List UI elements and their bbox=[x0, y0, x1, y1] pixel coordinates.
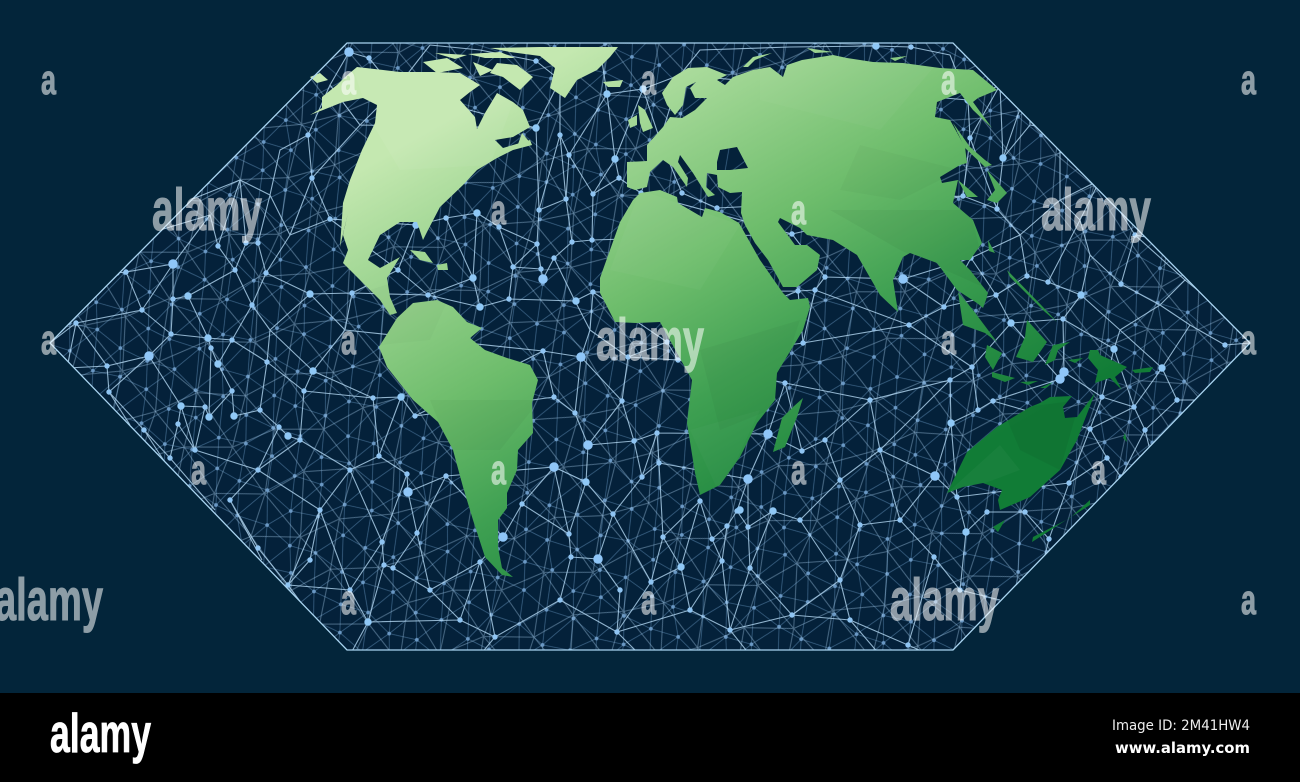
Arctic islands bbox=[310, 52, 533, 147]
small watermark letters: a bbox=[1241, 316, 1256, 363]
large watermark words: alamy bbox=[596, 307, 704, 373]
small watermark letters: a bbox=[341, 316, 356, 363]
map panel: Eckert projection hexagon bbox=[40, 40, 1260, 660]
Australia bbox=[947, 393, 1095, 510]
large watermark words: alamy bbox=[890, 567, 999, 633]
watermarks bbox=[0, 56, 1256, 633]
small watermark letters: a bbox=[941, 56, 956, 103]
small watermark letters: a bbox=[341, 56, 356, 103]
Malay peninsula and Indochina tip bbox=[957, 280, 997, 342]
faint network mesh bbox=[40, 40, 1260, 660]
New Guinea bbox=[1088, 350, 1153, 390]
large watermark words: alamy bbox=[0, 567, 103, 633]
map border bbox=[50, 43, 1250, 650]
small watermark letters: a bbox=[791, 186, 806, 233]
small watermark letters bbox=[41, 56, 1256, 623]
Africa bbox=[600, 190, 810, 495]
map hexagon fill bbox=[50, 43, 1250, 650]
South America bbox=[379, 300, 538, 577]
image id: Image ID: 2M41HW4 bbox=[1112, 718, 1250, 734]
small watermark letters: a bbox=[941, 316, 956, 363]
small watermark letters: a bbox=[491, 186, 506, 233]
large network nodes bbox=[149, 52, 1064, 559]
large watermark words bbox=[0, 177, 1151, 633]
low-poly land facets bbox=[340, 60, 1080, 495]
small watermark letters: a bbox=[1241, 576, 1256, 623]
small watermark letters: a bbox=[641, 56, 656, 103]
British Isles and Iceland bbox=[603, 80, 653, 132]
website: www.alamy.com bbox=[1115, 739, 1250, 757]
network nodes bbox=[67, 46, 1225, 645]
large watermark words: alamy bbox=[1041, 177, 1151, 243]
small watermark letters: a bbox=[41, 56, 56, 103]
Eurasia bbox=[627, 55, 997, 312]
footer bar bbox=[0, 693, 1300, 782]
medium network nodes bbox=[181, 46, 1162, 622]
Tasmania, New Zealand, New Caledonia bbox=[993, 433, 1127, 542]
small watermark letters: a bbox=[491, 446, 506, 493]
small watermark letters: a bbox=[341, 576, 356, 623]
small watermark letters: a bbox=[641, 576, 656, 623]
North America bbox=[310, 67, 532, 315]
continents bbox=[310, 47, 1153, 577]
small watermark letters: a bbox=[791, 446, 806, 493]
footer logo: alamy bbox=[50, 702, 151, 764]
small watermark letters: a bbox=[191, 446, 206, 493]
small watermark letters: a bbox=[1241, 56, 1256, 103]
Caribbean islands bbox=[410, 250, 448, 270]
small watermark letters: a bbox=[1091, 446, 1106, 493]
northern Eurasian islands bbox=[743, 48, 907, 67]
Indonesian islands bbox=[985, 320, 1083, 388]
large watermark words: alamy bbox=[152, 177, 262, 243]
Greenland bbox=[490, 47, 618, 98]
small watermark letters: a bbox=[41, 316, 56, 363]
Madagascar bbox=[773, 398, 803, 452]
bright network mesh bbox=[50, 45, 1250, 655]
small network nodes bbox=[67, 47, 1225, 645]
Japan, Sakhalin, Taiwan, Philippines bbox=[953, 123, 1057, 322]
